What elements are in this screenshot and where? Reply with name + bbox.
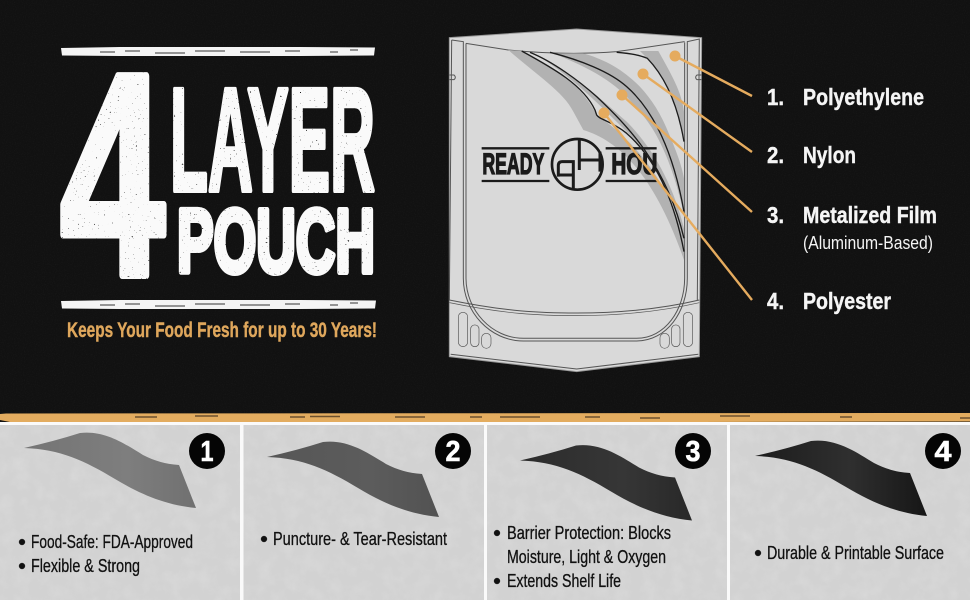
bullets 3: Extends Shelf Life	[507, 571, 621, 591]
layer name list	[767, 84, 937, 314]
bullets 1	[19, 532, 193, 576]
bullets 3: Barrier Protection: Blocks	[507, 523, 671, 543]
panel 1: polyethylene	[0, 425, 240, 600]
top chalk bar	[61, 47, 375, 56]
title: 4 Layer Pouch	[60, 14, 377, 342]
panel 4: polyester	[730, 425, 970, 600]
label 3: (Aluminum-Based)	[803, 233, 933, 253]
bullets 2: Puncture- & Tear-Resistant	[273, 529, 447, 549]
number badge 4: 4	[934, 436, 952, 468]
pointer 3	[616, 90, 752, 212]
pointer 2	[638, 68, 752, 152]
label 4: 4.	[767, 288, 784, 314]
bullets 3	[494, 523, 671, 591]
panel 2: nylon	[244, 425, 484, 600]
pouch outline details	[449, 39, 702, 369]
text: LAYER	[170, 58, 375, 222]
pouch diagram	[449, 29, 702, 372]
label 1	[767, 84, 924, 110]
number badge 3: 3	[686, 436, 700, 468]
label 2: 2.	[767, 142, 784, 168]
label 3	[767, 202, 937, 253]
swatch 2	[267, 442, 439, 517]
big numeral 4: 4	[60, 14, 166, 337]
swatch 1	[24, 433, 196, 508]
bullets 1: Food-Safe: FDA-Approved	[31, 532, 193, 552]
bullets 1: Flexible & Strong	[31, 556, 140, 576]
number badge 3	[675, 433, 711, 469]
dark chalkboard background	[0, 0, 970, 425]
number badge 1	[189, 433, 225, 469]
bottom chalk bar	[61, 300, 376, 309]
label 3: 3.	[767, 202, 784, 228]
label 2	[767, 142, 856, 168]
pouch body	[449, 29, 702, 372]
leader lines and dots	[598, 50, 752, 300]
number badge 1: 1	[200, 436, 214, 468]
pointer 1	[670, 50, 752, 96]
brand logo: READY	[482, 148, 545, 181]
tagline: Keeps Your Food Fresh for up to 30 Years!	[67, 319, 377, 342]
bullets 3: Moisture, Light & Oxygen	[507, 547, 666, 567]
swatch 4	[755, 441, 927, 516]
number badge 4	[925, 433, 961, 469]
number badge 2: 2	[446, 436, 460, 468]
concrete panels backdrop	[0, 422, 970, 600]
pointer 4	[598, 108, 752, 300]
label 1: Polyethylene	[803, 84, 924, 110]
brand logo: HOU	[611, 148, 657, 181]
panel 3: metalized film	[487, 425, 727, 600]
label 4	[767, 288, 891, 314]
brand logo	[482, 139, 657, 190]
label 4: Polyester	[803, 288, 891, 314]
label 3: Metalized Film	[803, 202, 937, 228]
gold divider band	[0, 413, 970, 422]
label 2: Nylon	[803, 142, 856, 168]
vent pills	[458, 312, 693, 348]
swatch 3	[520, 445, 692, 520]
word POUCH: POUCH	[177, 192, 375, 292]
layer edge lines	[522, 51, 684, 252]
label 1: 1.	[767, 84, 784, 110]
layer shadows	[508, 50, 684, 260]
number badge 2	[435, 433, 471, 469]
